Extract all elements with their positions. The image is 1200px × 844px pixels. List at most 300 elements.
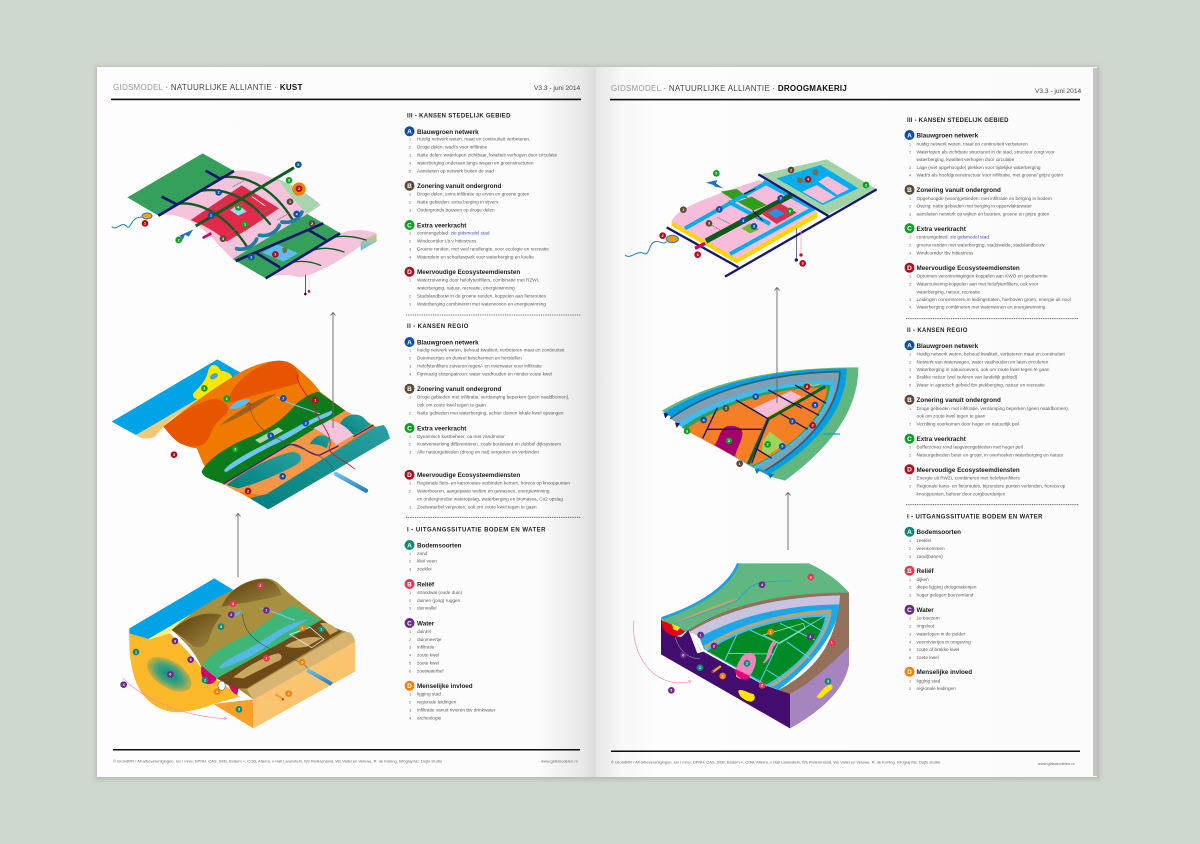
badges: 3 [697, 253, 699, 257]
text: II kansen regio: Zonering vanuit ondergrond [417, 386, 501, 393]
badges [120, 582, 325, 713]
text: I uitgangssituatie: infiltratie vanuit rivieren tbv drinkwater [417, 707, 496, 712]
badges: 2 [298, 187, 300, 191]
text: II kansen regio: Waterboeren, aangepaste teelten en gewassen, energiewinning [417, 489, 550, 494]
text: I uitgangssituatie droogmakerij: I - UITGANGSSITUATIE BODEM EN WATER [907, 514, 1043, 520]
badges: 3 [686, 429, 688, 433]
text: II kansen regio droogmakerij: Zonering vanuit ondergrond [916, 397, 1001, 404]
text: I uitgangssituatie droogmakerij: 1 [909, 679, 911, 683]
text: III kansen stedelijk gebied: Extra veerkracht [417, 222, 467, 230]
text: II kansen regio droogmakerij: ook om zoute kwel tegen te gaan [916, 414, 986, 419]
text: I uitgangssituatie droogmakerij: regionale leidingen [916, 686, 956, 691]
text: III kansen stedelijk gebied: Huidig netwerk weten, maat en continuïteit verbeteren, [417, 137, 530, 142]
panel: right page Droogmakerij [596, 67, 1097, 777]
footer right [611, 750, 1080, 766]
text: II kansen regio: 4 [409, 372, 411, 376]
text: III kansen stedelijk gebied droogmakerij: 2 [909, 150, 911, 154]
text: III kansen stedelijk gebied: 1 [409, 232, 411, 236]
badges: 4 [807, 178, 810, 182]
badges: 1 [770, 630, 772, 634]
badges: 4 [296, 212, 299, 216]
text: II kansen regio: Droge gebieden met infiltratie, verdamping beperken (geen naaldbomen), [417, 395, 569, 400]
text: III kansen stedelijk gebied: Waterplein en schaduwpark voor waterberging en koelte [417, 254, 534, 259]
text: III kansen stedelijk gebied droogmakerij: centrumgebied: zie gidsmodel stad [916, 235, 989, 240]
badges: 2 [761, 684, 763, 688]
badges: 2 [230, 613, 232, 617]
badges: 2 [247, 489, 249, 493]
text: II kansen regio: 3 [409, 505, 411, 509]
text: III kansen stedelijk gebied droogmakerij: 3 [909, 251, 911, 255]
text: I uitgangssituatie droogmakerij: 5 [909, 648, 911, 652]
text: III kansen stedelijk gebied droogmakerij [904, 118, 1079, 319]
text: III kansen stedelijk gebied: 2 [409, 146, 411, 150]
text: I uitgangssituatie: Reliëf [417, 582, 435, 588]
badges: 1 [320, 628, 322, 632]
text: I uitgangssituatie: strandwal (oude duin) [417, 590, 463, 595]
text: I uitgangssituatie droogmakerij: zeeklei [916, 538, 931, 543]
badges: 3 [250, 255, 252, 259]
text: I uitgangssituatie: D [407, 683, 412, 690]
badges: 5 [755, 395, 757, 399]
arrow: droogmakerij regio to stedelijk [774, 288, 780, 403]
text: I uitgangssituatie droogmakerij: 2 [909, 586, 911, 590]
badges: 3 [809, 635, 811, 639]
text: I uitgangssituatie droogmakerij: B [907, 568, 912, 575]
page header right: V3.3 - juni 2014 [1035, 88, 1082, 95]
badges: 1 [289, 200, 291, 204]
badges: 6 [682, 653, 684, 657]
text: II kansen regio: 1 [409, 349, 411, 353]
text: III kansen stedelijk gebied droogmakerij: C [907, 226, 912, 233]
badges: 3 [270, 434, 272, 438]
text: II kansen regio droogmakerij: 2 [909, 454, 911, 458]
badges: 3 [238, 708, 240, 712]
badges: 3 [222, 237, 224, 241]
text: II kansen regio droogmakerij: Water in agrarisch gebied tbv piekberging, natuur en recreatie [916, 383, 1045, 388]
badges: 2 [288, 692, 290, 696]
text: I uitgangssituatie: 2 [409, 701, 411, 705]
text: III kansen stedelijk gebied droogmakerij: aansluiten netwerk op wijken en buurten, groene en grijze goten [916, 212, 1050, 217]
text: III kansen stedelijk gebied droogmakerij: B [907, 187, 912, 194]
map: kust stedelijk gebied [112, 153, 377, 295]
text: I uitgangssituatie: 6 [409, 669, 411, 673]
badges: 2 [767, 443, 769, 447]
badges: 1 [144, 222, 146, 226]
text: II kansen regio droogmakerij: II - KANSEN REGIO [907, 328, 968, 334]
text: I uitgangssituatie droogmakerij: zoete kwel [916, 655, 939, 660]
badges: 1 [700, 633, 702, 637]
text: I uitgangssituatie: archeologie [417, 715, 442, 720]
text: II kansen regio: 3 [409, 451, 411, 455]
text: II kansen regio droogmakerij: Waterberging in natuuroevers, ook om zoute kwel tegen te gaan [916, 367, 1050, 372]
badges: 2 [718, 208, 720, 212]
text: I uitgangssituatie droogmakerij: 2 [909, 687, 911, 691]
text: III kansen stedelijk gebied droogmakerij: Extra veerkracht [916, 226, 967, 233]
text: III kansen stedelijk gebied droogmakerij: 2 [909, 244, 911, 248]
text: III kansen stedelijk gebied droogmakerij: Leidingen concentreren in leidingstraten, hierboven groen, energie uit riool [916, 297, 1071, 302]
text: I uitgangssituatie droogmakerij: hoger gelegen boezemland [916, 593, 974, 598]
page header right: GIDSMODEL · NATUURLIJKE ALLIANTIE · DROOGMAKERIJ [611, 84, 847, 93]
badges: 3 [802, 262, 804, 266]
text: III kansen stedelijk gebied: 3 [409, 154, 411, 158]
text: II kansen regio droogmakerij: Natuurgebieden beter en groter, in overhoeken waterberging en natuur [916, 453, 1064, 458]
badges: 3 [203, 387, 205, 391]
text: I uitgangssituatie droogmakerij: 4 [909, 640, 911, 644]
text: III kansen stedelijk gebied droogmakerij: 3 [909, 166, 911, 170]
badges: 2 [746, 662, 748, 666]
text: II kansen regio: Dynamisch kustbeheer, oa met zandmotor [417, 434, 505, 439]
text: III kansen stedelijk gebied droogmakerij: waterberging, kwaliteit verhogen door circulatie [916, 157, 1015, 162]
text: II kansen regio droogmakerij: 1 [909, 477, 911, 481]
badges: 5 [297, 163, 299, 167]
text: II kansen regio: 2 [409, 411, 411, 415]
text: I uitgangssituatie droogmakerij: veenriviertjes in omgeving [916, 639, 971, 644]
text: III kansen stedelijk gebied droogmakerij: 1 [909, 197, 911, 201]
text: II kansen regio droogmakerij: 2 [909, 360, 911, 364]
text: II kansen regio: ook om zoute kwel tegen te gaan [417, 402, 486, 407]
text: II kansen regio: Blauwgroen netwerk [417, 340, 479, 346]
badges: 3 [305, 421, 307, 425]
text: II kansen regio droogmakerij: Extra veerkracht [916, 436, 967, 443]
text: III kansen stedelijk gebied: 1 [409, 279, 411, 283]
text: II kansen regio droogmakerij: 4 [909, 376, 911, 380]
text: III kansen stedelijk gebied droogmakerij: Waterberging combineren met waterwonen en energiewinning [916, 305, 1046, 310]
text: III kansen stedelijk gebied droogmakerij: 3 [909, 213, 911, 217]
badges: 2 [791, 420, 793, 424]
text: II kansen regio droogmakerij: Meervoudige Ecosysteemdiensten [916, 467, 1020, 474]
text: I uitgangssituatie: 2 [409, 599, 411, 603]
text: III kansen stedelijk gebied: Stadslandbouw in de groene randen, koppelen aan fietsroutes [417, 293, 547, 298]
text: I uitgangssituatie: Bodemsoorten [417, 542, 462, 550]
badges: 2 [713, 644, 715, 648]
badges: 2 [790, 168, 792, 172]
badges: 3 [827, 680, 829, 684]
text: II kansen regio droogmakerij: Energie uit RWZI, combineren met helofytenfilters [916, 476, 1020, 481]
text: III kansen stedelijk gebied droogmakerij: 2 [909, 205, 911, 209]
text: III kansen stedelijk gebied droogmakerij: 4 [909, 306, 911, 310]
badges: 2 [218, 191, 220, 195]
text: I uitgangssituatie: A [407, 542, 412, 549]
text: III kansen stedelijk gebied: Meervoudige Ecosysteemdiensten [417, 269, 520, 276]
text: II kansen regio droogmakerij: 2 [909, 485, 911, 489]
text: III kansen stedelijk gebied: Groene randen, met veel randlengte, voor ecologie en recreatie [417, 246, 549, 251]
text: I uitgangssituatie: Menselijke invloed [417, 683, 473, 690]
text: I uitgangssituatie: 1 [409, 591, 411, 595]
text: I uitgangssituatie droogmakerij [904, 514, 1043, 691]
text: III kansen stedelijk gebied droogmakerij: Opgehoogde (woon)gebieden: met infiltratie en berging in bodem [916, 196, 1052, 201]
text: II kansen regio: Zoetwaterbel vergroten, ook om zoute kwel tegen te gaan [417, 504, 537, 509]
badges: 1 [314, 398, 316, 402]
text: III kansen stedelijk gebied: Zonering vanuit ondergrond [417, 183, 501, 190]
badges: 1 [682, 208, 684, 212]
text: I uitgangssituatie droogmakerij: zoute of brakke kwel [916, 647, 959, 652]
badges [659, 167, 869, 267]
text: III kansen stedelijk gebied droogmakerij: waterberging, natuur, recreatie [916, 289, 980, 294]
badges: 4 [742, 219, 745, 223]
text: II kansen regio: Extra veerkracht [417, 426, 467, 432]
badges: 3 [288, 179, 290, 183]
text: III kansen stedelijk gebied: centrumgebied: zie gidsmodel stad [417, 231, 490, 236]
text: II kansen regio: Meervoudige Ecosysteemdiensten [417, 472, 520, 479]
text: I uitgangssituatie: duinvallei [417, 606, 437, 611]
text: III kansen stedelijk gebied: Blauwgroen netwerk [417, 129, 479, 136]
text: I uitgangssituatie: C [407, 620, 412, 627]
text: III kansen stedelijk gebied: A [407, 129, 412, 136]
footer left: © GrondRR / All arbeverenigingen, iov / mmv. DPNH, CAS, SKB, Bodem +, COB, Alterra, v Hall Larenstein, Ws Rivierenland, Ws Vallei en Veluwe, R. de Koning. Infographic: Dujto studio [113, 758, 443, 764]
text: I uitgangssituatie droogmakerij: A [907, 529, 912, 536]
badges: 2 [204, 678, 206, 682]
text: I uitgangssituatie: zand [417, 551, 428, 556]
text: I uitgangssituatie droogmakerij: Reliëf [916, 568, 935, 575]
text: I uitgangssituatie droogmakerij: diepe ligging droogmakerijen [916, 585, 977, 590]
text: I uitgangssituatie: B [407, 581, 412, 588]
badges: 5 [670, 689, 672, 693]
badges: 1 [210, 214, 212, 218]
map: droogmakerij uitgangssituatie [634, 563, 849, 728]
text: II kansen regio droogmakerij: 5 [909, 384, 911, 388]
text: II kansen regio droogmakerij: 1 [909, 446, 911, 450]
text: III kansen stedelijk gebied droogmakerij: huidig netwerk weten, maat en continuïteit verbeteren [916, 141, 1028, 146]
text: I uitgangssituatie droogmakerij: Menselijke invloed [916, 669, 972, 676]
badges: 2 [722, 674, 724, 678]
text: III kansen stedelijk gebied: D [407, 269, 412, 276]
text: II kansen regio: en ondergrondse wateropslag, waterberging en biomassa, Co2 opslag [417, 496, 563, 501]
badges: 3 [810, 575, 812, 579]
text: I uitgangssituatie: 3 [409, 568, 411, 572]
badges: 5 [814, 403, 816, 407]
text: II kansen regio: 1 [409, 435, 411, 439]
text: I uitgangssituatie droogmakerij: 1 [909, 617, 911, 621]
text: II kansen regio: A [407, 339, 412, 346]
text: I uitgangssituatie: 3 [409, 708, 411, 712]
text: III kansen stedelijk gebied: Droge delen: extra infiltratie op erven en groene goten [417, 192, 530, 197]
text: III kansen stedelijk gebied: 2 [409, 239, 411, 243]
text: III kansen stedelijk gebied droogmakerij: D [907, 265, 912, 272]
text: I uitgangssituatie: zoete kwel [417, 660, 439, 665]
badges: 3 [753, 225, 755, 229]
footer right: www.gidsmodelen.nl [1038, 761, 1075, 766]
text: II kansen regio droogmakerij: Verzilting voorkomen door hoger en natuurlijk peil [916, 421, 1019, 426]
text: I uitgangssituatie droogmakerij: waterlopen in de polder [916, 631, 966, 636]
text: II kansen regio: 1 [409, 396, 411, 400]
text: I uitgangssituatie: 1 [409, 630, 411, 634]
text: III kansen stedelijk gebied: 2 [409, 200, 411, 204]
page header right [610, 84, 1082, 100]
text: II kansen regio: Helofytenfilters zuiveren regen/- en rivierwater voor infiltratie [417, 364, 542, 369]
text: I uitgangssituatie [404, 528, 546, 720]
text: II kansen regio droogmakerij: knooppunten, beheer door zorgboerderijen [916, 491, 1006, 496]
text: II kansen regio: Fijnmazig slotenpatroon: water vasthouden en minder zoute kwel [417, 371, 552, 376]
text: I uitgangssituatie droogmakerij: 3 [909, 632, 911, 636]
text: I uitgangssituatie droogmakerij: zand(banen) [916, 554, 943, 559]
text: II kansen regio droogmakerij: B [907, 397, 912, 404]
text: I uitgangssituatie droogmakerij: ligging stad [916, 678, 941, 683]
text: III kansen stedelijk gebied: 1 [409, 138, 411, 142]
badges: 3 [173, 453, 175, 457]
text: I uitgangssituatie: 3 [409, 646, 411, 650]
text: III kansen stedelijk gebied: 5 [409, 169, 411, 173]
text: II kansen regio droogmakerij: Netwerk van waterwegen, water vasthouden en laten circuleren [916, 359, 1049, 364]
badges: 1 [265, 657, 267, 661]
text: III kansen stedelijk gebied: B [407, 183, 412, 190]
badges: 2 [725, 407, 727, 411]
badges [668, 574, 835, 694]
footer left [113, 749, 580, 764]
text: II kansen regio: B [407, 386, 412, 393]
text: III kansen stedelijk gebied: Ondergronds bouwen op droge delen [417, 207, 495, 212]
text: I uitgangssituatie droogmakerij: 2 [909, 547, 911, 551]
badges: 1 [244, 223, 246, 227]
text: III kansen stedelijk gebied droogmakerij: Waterlopen als zichtbare structuren in de stad, structuur zorgt voor [916, 149, 1055, 154]
footer right: © GrondRR / All arbeverenigingen, iov / mmv. DPNH, CAS, SKB, Bodem +, COB, Alterra, v Hall Larenstein, Ws Rivierenland, Ws Vallei en Veluwe, R. de Koning. Infographic: Dujto studio [611, 760, 941, 764]
text: I uitgangssituatie: ligging stad [417, 692, 441, 697]
badges: 5 [781, 445, 783, 449]
text: I uitgangssituatie droogmakerij: Water [916, 607, 934, 614]
badges: 3 [232, 602, 234, 606]
text: II kansen regio droogmakerij: 1 [909, 352, 911, 356]
page header left: GIDSMODEL · NATUURLIJKE ALLIANTIE · KUST [113, 83, 303, 92]
text: III kansen stedelijk gebied: Natte gebieden: extra berging in vijvers [417, 199, 499, 204]
badges: 5 [715, 172, 717, 176]
text: II kansen regio droogmakerij: Bufferzones rond laagveengebieden met hoger peil [916, 445, 1023, 450]
text: III kansen stedelijk gebied droogmakerij: 3 [909, 298, 911, 302]
badges: 4 [237, 206, 240, 210]
text: III kansen stedelijk gebied: Natte delen: waterlopen zichtbaar, kwaliteit verhogen door circulatie [417, 153, 558, 158]
text: II kansen regio droogmakerij: Blauwgroen netwerk [916, 343, 979, 350]
text: II kansen regio: C [407, 425, 412, 432]
text: III kansen stedelijk gebied droogmakerij: Wadi's als hoofdgroenstructuur voor infiltratie, met groene/ grijze goten [916, 173, 1064, 178]
text: III kansen stedelijk gebied droogmakerij: Zonering vanuit ondergrond [916, 187, 1001, 194]
badges: 6 [169, 673, 171, 677]
text: I uitgangssituatie droogmakerij: D [907, 669, 912, 676]
text: I uitgangssituatie droogmakerij: 2 [909, 625, 911, 629]
text: III kansen stedelijk gebied droogmakerij: III - KANSEN STEDELIJK GEBIED [907, 118, 1009, 124]
page shadow [95, 66, 1100, 780]
badges [142, 161, 315, 260]
text: III kansen stedelijk gebied droogmakerij: 4 [909, 174, 911, 178]
badges: 4 [216, 690, 219, 694]
text: II kansen regio: Duinmeertjes en duinrel beschermen en herstellen [417, 356, 522, 361]
badges: 6 [806, 385, 808, 389]
text: III kansen stedelijk gebied: C [407, 222, 412, 229]
text: III kansen stedelijk gebied [404, 114, 581, 315]
badges: 3 [274, 253, 276, 257]
text: II kansen regio: 3 [409, 365, 411, 369]
badges: 3 [220, 625, 222, 629]
badges: 2 [226, 397, 228, 401]
text: I uitgangssituatie droogmakerij: C [907, 607, 912, 614]
text: II kansen regio droogmakerij: A [907, 343, 912, 350]
text: III kansen stedelijk gebied droogmakerij: 2 [909, 283, 911, 287]
text: I uitgangssituatie: duinmeertje [417, 637, 442, 642]
text: II kansen regio: II - KANSEN REGIO [407, 324, 469, 330]
map: droogmakerij stedelijk gebied [625, 159, 877, 277]
text: III kansen stedelijk gebied: waterberging, natuur, recreatie, energiewinning [417, 285, 515, 290]
badges: 4 [703, 418, 706, 422]
text: III kansen stedelijk gebied: 3 [409, 208, 411, 212]
badges: 1 [301, 626, 303, 630]
text: III kansen stedelijk gebied droogmakerij: Meervoudige Ecosysteemdiensten [916, 265, 1020, 272]
text: I uitgangssituatie droogmakerij: Bodemsoorten [916, 529, 961, 536]
text: II kansen regio droogmakerij: Regionale kano- en fietsroutes, bijzondere punten verbinden, horeca op [916, 484, 1066, 489]
text: I uitgangssituatie: zoute kwel [417, 653, 439, 658]
badges: 3 [174, 639, 176, 643]
arrow: uitgangssituatie to regio [236, 514, 240, 577]
badges: 2 [178, 238, 180, 242]
text: III kansen stedelijk gebied: Windcorridor t.b.v hittestress [417, 238, 477, 243]
text: III kansen stedelijk gebied droogmakerij: groene randen met waterberging, stadsweide, stadslandbouw [916, 243, 1045, 248]
text: III kansen stedelijk gebied droogmakerij: A [907, 132, 912, 139]
page header left: V3.3 - juni 2014 [534, 85, 581, 92]
badges: 2 [311, 222, 313, 226]
page header left [111, 83, 581, 100]
text: I uitgangssituatie droogmakerij: 3 [909, 555, 911, 559]
text: II kansen regio: Alle natuurgebieden (droog en nat) vergroten en verbinden [417, 450, 539, 455]
text: III kansen stedelijk gebied: 3 [409, 302, 411, 306]
text: II kansen regio droogmakerij: Brakke natuur (wel isoleren van landelijk gebied) [916, 375, 1018, 380]
text: I uitgangssituatie: duinrel [417, 629, 431, 634]
text: I uitgangssituatie: 1 [409, 693, 411, 697]
arrow: droogmakerij uitgangssituatie to regio [786, 492, 790, 550]
badges: 1 [265, 609, 267, 613]
text: III kansen stedelijk gebied droogmakerij: 1 [909, 142, 911, 146]
text: II kansen regio droogmakerij: 2 [909, 422, 911, 426]
text: I uitgangssituatie: I - UITGANGSSITUATIE BODEM EN WATER [407, 528, 546, 534]
text: I uitgangssituatie: 2 [409, 560, 411, 564]
badges: 2 [865, 183, 867, 187]
badges: 2 [728, 439, 730, 443]
text: I uitgangssituatie droogmakerij: dijken [916, 577, 929, 582]
badges: 1 [739, 462, 741, 466]
map: kust uitgangssituatie [120, 578, 355, 728]
text: III kansen stedelijk gebied droogmakerij: Blauwgroen netwerk [916, 132, 979, 140]
text: II kansen regio: 2 [409, 443, 411, 447]
text: III kansen stedelijk gebied: 3 [409, 247, 411, 251]
text: III kansen stedelijk gebied droogmakerij: 1 [909, 275, 911, 279]
text: I uitgangssituatie: zeeklei [417, 567, 432, 572]
badges: 2 [282, 397, 284, 401]
text: I uitgangssituatie: duinen (jong) ruggen [417, 598, 461, 603]
text: I uitgangssituatie droogmakerij: 6 [909, 656, 911, 660]
badges: 1 [699, 666, 701, 670]
badges: 3 [301, 660, 303, 664]
text: III kansen stedelijk gebied droogmakerij: Waterzuivering koppelen aan met helofytenfilters, ook voor [916, 282, 1039, 287]
text: II kansen regio: Regionale fiets- en kanoroutes verbinden kernen, horeca op knooppunten [417, 481, 570, 486]
text: II kansen regio droogmakerij: Droge gebieden met infiltratie, verdamping beperken (geen naaldbomen), [916, 406, 1069, 411]
text: III kansen stedelijk gebied: Aansluiten op netwerk buiten de stad [417, 168, 494, 173]
badges: 3 [234, 448, 236, 452]
text: II kansen regio droogmakerij [904, 328, 1079, 505]
text: I uitgangssituatie droogmakerij: veenkommen [916, 546, 945, 551]
text: I uitgangssituatie: Water [417, 620, 435, 628]
text: III kansen stedelijk gebied: Waterzuivering door helofytenfilters, combinatie met RZWI, [417, 278, 539, 283]
text: III kansen stedelijk gebied: 4 [409, 255, 411, 259]
text: II kansen regio: Natte gebieden met waterberging, achter duinen lokale kwel opvangen [417, 410, 564, 415]
text: I uitgangssituatie: 2 [409, 638, 411, 642]
text: I uitgangssituatie: 4 [409, 654, 411, 658]
map: kust regio [112, 359, 390, 509]
text: III kansen stedelijk gebied: Droge delen: wadi's voor infiltratie [417, 145, 488, 150]
badges: 6 [789, 209, 791, 213]
text: I uitgangssituatie droogmakerij: ringsloot [916, 624, 935, 629]
text: I uitgangssituatie: 5 [409, 661, 411, 665]
text: II kansen regio droogmakerij: C [907, 436, 912, 443]
text: II kansen regio: huidig netwerk weten, behoud kwaliteit, verbeteren maat en continuïteit [417, 348, 565, 353]
text: I uitgangssituatie: 3 [409, 607, 411, 611]
text: II kansen regio droogmakerij: 1 [909, 407, 911, 411]
text: I uitgangssituatie: 4 [409, 716, 411, 720]
text: I uitgangssituatie droogmakerij: 1 [909, 539, 911, 543]
